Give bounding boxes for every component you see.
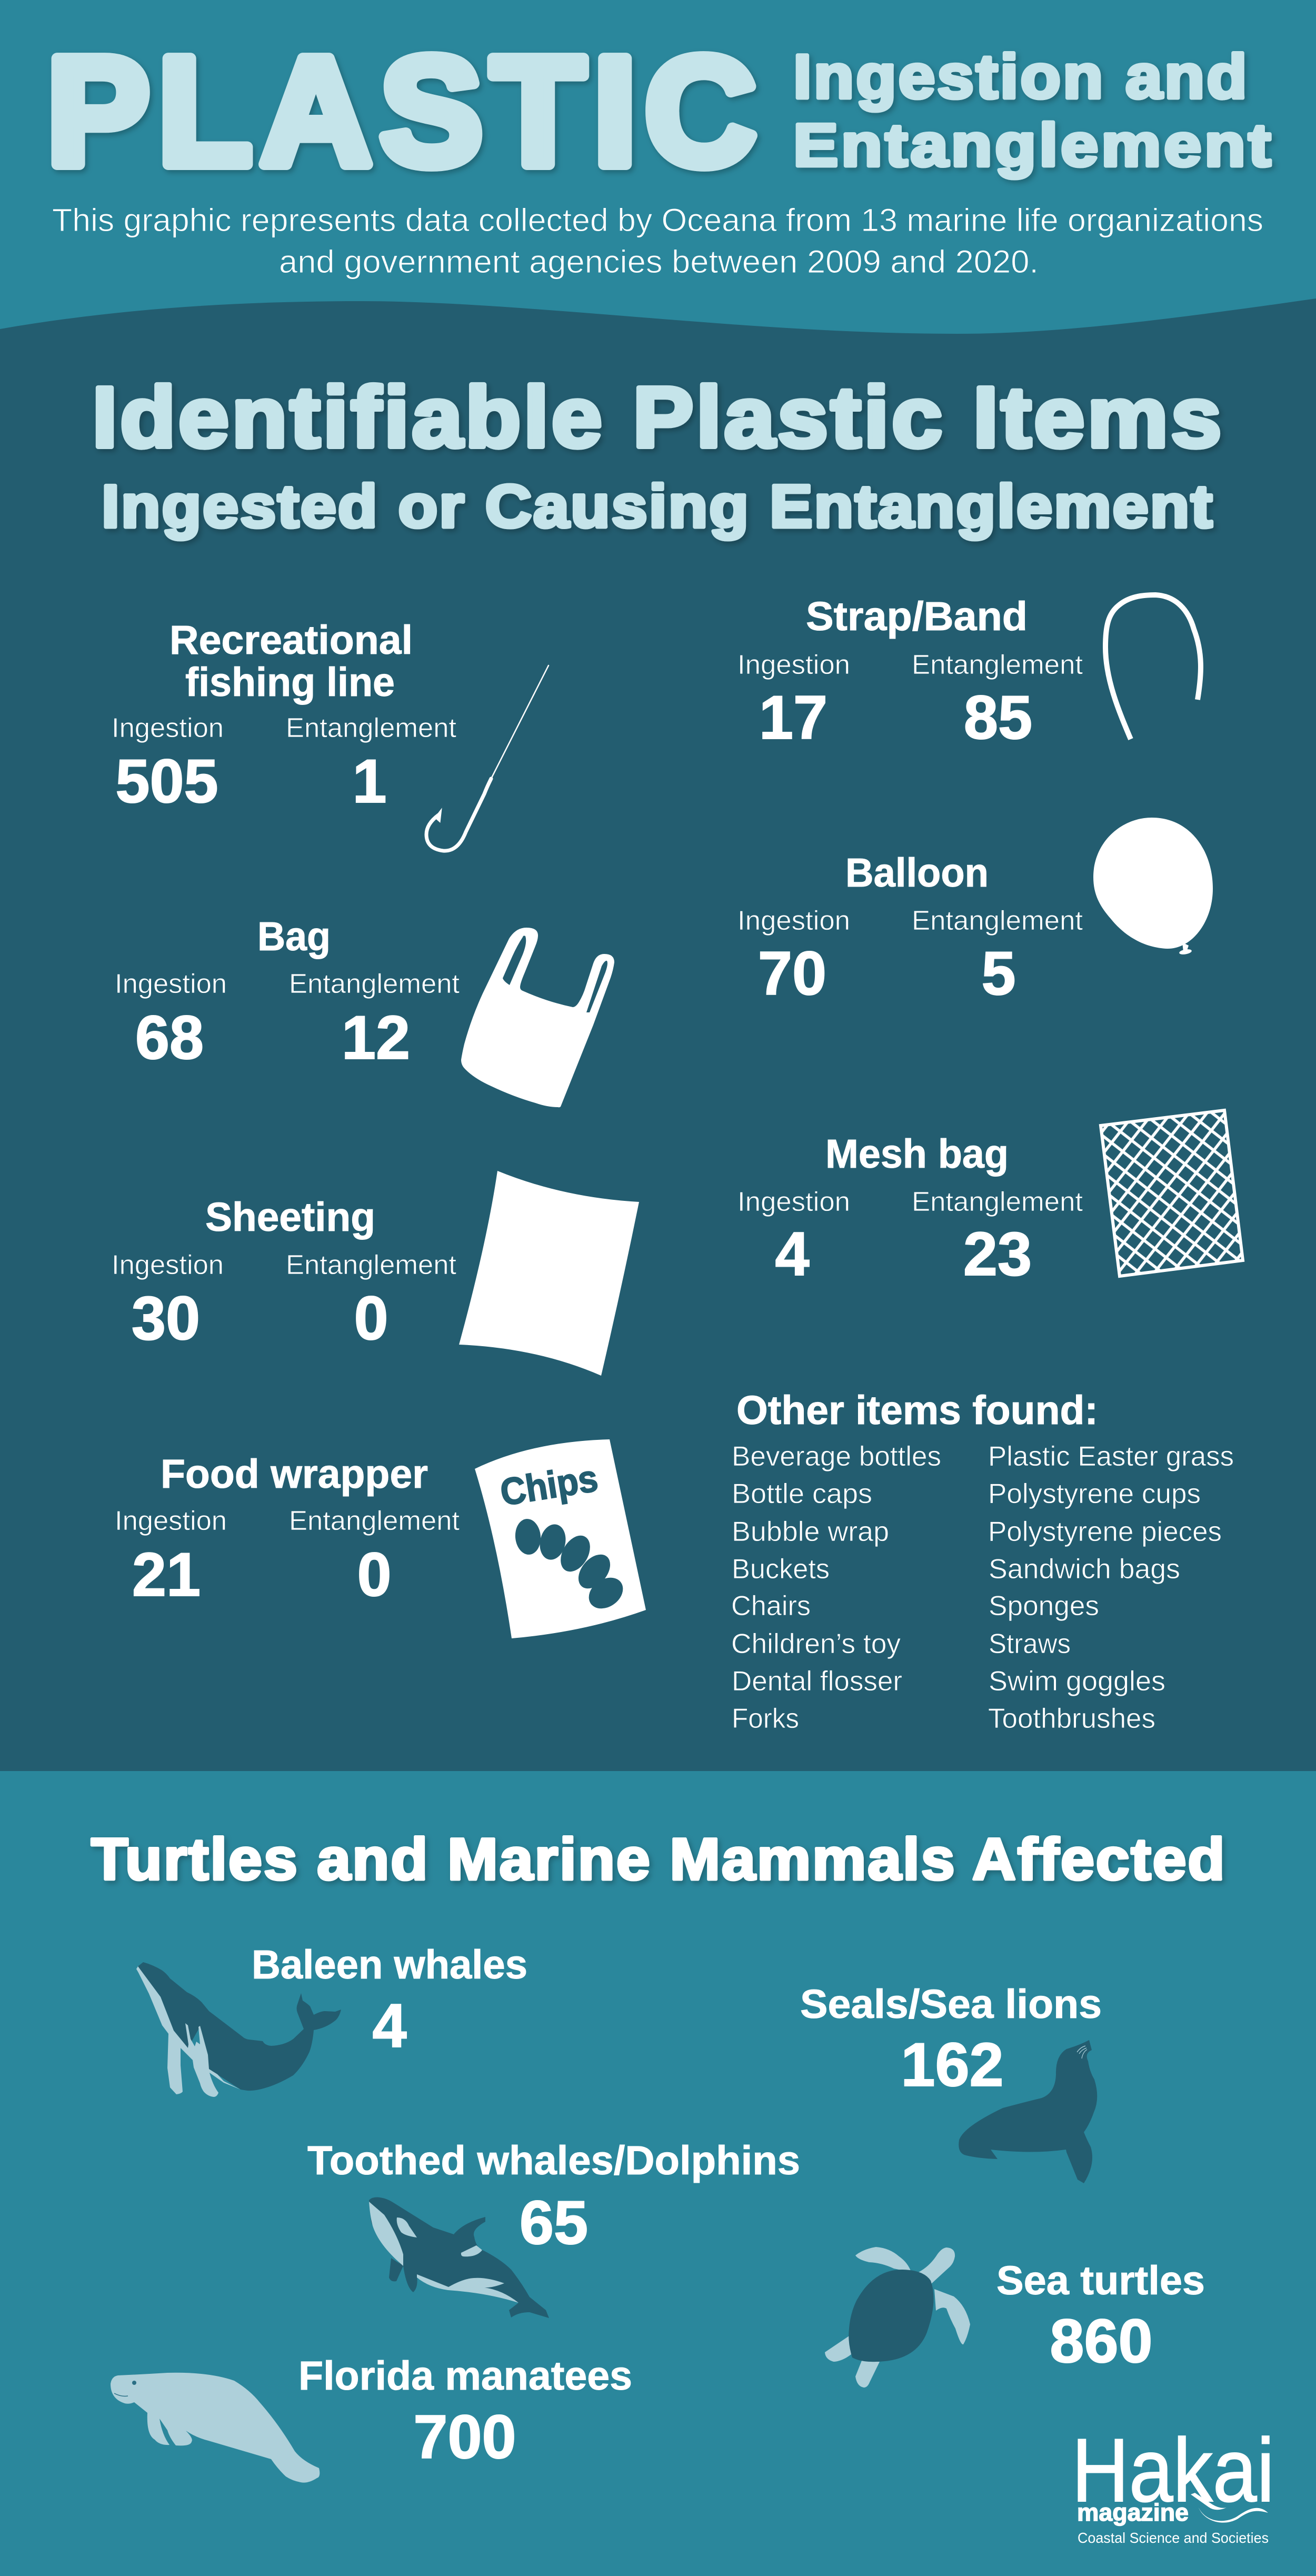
entanglement label: Entanglement xyxy=(286,1250,457,1280)
ingestion label: Ingestion xyxy=(737,650,850,680)
ingestion count: 68 xyxy=(135,1003,204,1072)
subtitle line: Entanglement: Entanglement xyxy=(793,111,1271,178)
label: Seals/Sea lions xyxy=(800,1982,1102,2027)
count: 860 xyxy=(1050,2306,1153,2375)
list: column two: Polystyrene cups xyxy=(988,1478,1201,1509)
icon: plastic bag xyxy=(461,928,614,1107)
list: column two: Swim goggles xyxy=(989,1666,1165,1697)
section subheading: Ingested or Causing Entanglement xyxy=(102,473,1212,540)
panel: recreational fishing line xyxy=(112,618,549,851)
ingestion label: Ingestion xyxy=(112,713,224,743)
panel: strap/band xyxy=(737,594,1201,752)
title: PLASTIC: PLASTIC xyxy=(47,25,756,197)
ingestion count: 21 xyxy=(132,1540,201,1609)
count: 4 xyxy=(372,1991,407,2060)
list: column one: Forks xyxy=(732,1703,799,1734)
icon: manatee xyxy=(111,2373,320,2483)
entanglement label: Entanglement xyxy=(286,713,457,743)
heading: Recreational xyxy=(170,618,413,663)
list: column two: Sandwich bags xyxy=(989,1554,1180,1585)
logo magazine: magazine xyxy=(1077,2499,1189,2526)
heading: Mesh bag xyxy=(825,1131,1009,1177)
label: Baleen whales xyxy=(252,1942,527,1987)
ingestion count: 505 xyxy=(115,747,218,815)
logo: Hakai magazine xyxy=(1072,2420,1274,2546)
panel: sheeting xyxy=(112,1171,639,1376)
entanglement label: Entanglement xyxy=(912,906,1083,936)
entanglement count: 0 xyxy=(357,1540,392,1609)
panel: mesh bag xyxy=(737,1110,1243,1288)
ingestion count: 30 xyxy=(132,1284,200,1352)
ingestion label: Ingestion xyxy=(112,1250,224,1280)
ingestion label: Ingestion xyxy=(737,1187,850,1217)
entanglement count: 1 xyxy=(352,747,387,815)
panel: seals/sea lions xyxy=(800,1982,1102,2183)
panel: other items found xyxy=(731,1388,1234,1734)
icon: sea turtle xyxy=(825,2247,970,2388)
count: 65 xyxy=(520,2188,588,2257)
ingestion label: Ingestion xyxy=(115,1506,227,1536)
icon: sea lion xyxy=(959,2040,1097,2183)
ingestion count: 70 xyxy=(758,939,826,1008)
section heading: Identifiable Plastic Items xyxy=(92,369,1221,540)
intro paragraph xyxy=(52,202,1263,280)
heading: Bag xyxy=(257,914,331,959)
list: column two: Polystyrene pieces xyxy=(988,1516,1222,1547)
list: column two xyxy=(988,1441,1234,1734)
section heading: turtles and marine mammals: Turtles and Marine Mammals Affected xyxy=(91,1827,1225,1893)
panel: florida manatees xyxy=(111,2353,632,2483)
entanglement label: Entanglement xyxy=(289,969,460,999)
entanglement count: 85 xyxy=(964,683,1032,752)
list: column two: Plastic Easter grass xyxy=(988,1441,1234,1472)
list: column one: Buckets xyxy=(732,1554,830,1585)
icon: balloon xyxy=(1093,818,1213,956)
panel: food wrapper xyxy=(115,1439,646,1638)
logo wordmark: Hakai xyxy=(1072,2420,1274,2521)
ingestion label: Ingestion xyxy=(115,969,227,999)
icon: chips bag: Chips xyxy=(497,1457,601,1514)
entanglement label: Entanglement xyxy=(912,650,1083,680)
intro paragraph: and government agencies between 2009 and 2020. xyxy=(279,244,1039,280)
count: 700 xyxy=(413,2402,516,2471)
panel: toothed whales/dolphins xyxy=(307,2138,800,2318)
label: Sea turtles xyxy=(996,2258,1205,2303)
heading: Food wrapper xyxy=(161,1451,428,1497)
panel: dark wave section xyxy=(0,299,1316,1771)
ingestion count: 4 xyxy=(775,1219,810,1288)
entanglement count: 12 xyxy=(342,1003,410,1072)
entanglement count: 0 xyxy=(354,1284,388,1352)
list: column one: Dental flosser xyxy=(732,1666,902,1697)
heading: fishing line xyxy=(185,660,395,705)
ingestion label: Ingestion xyxy=(737,906,850,936)
label: Florida manatees xyxy=(298,2353,632,2399)
panel: bag xyxy=(115,914,614,1107)
heading: Other items found: xyxy=(736,1388,1098,1433)
logo tagline: Coastal Science and Societies xyxy=(1078,2530,1269,2546)
heading xyxy=(170,618,413,705)
icon: chips bag xyxy=(475,1439,646,1638)
entanglement count: 5 xyxy=(981,939,1016,1008)
icon: plastic sheet xyxy=(459,1171,639,1376)
panel: balloon xyxy=(737,818,1213,1008)
icon: mesh net xyxy=(1101,1110,1243,1276)
icon: fish hook xyxy=(426,665,549,851)
panel: sea turtles xyxy=(825,2247,1205,2388)
entanglement label: Entanglement xyxy=(912,1187,1083,1217)
list: column one: Bottle caps xyxy=(732,1478,872,1509)
list: column one: Chairs xyxy=(731,1590,811,1622)
heading: Sheeting xyxy=(205,1195,375,1240)
list: column two: Sponges xyxy=(989,1590,1099,1622)
heading: Balloon xyxy=(845,850,989,896)
list: column two: Straws xyxy=(989,1628,1071,1659)
panel: baleen whales xyxy=(136,1942,527,2097)
icon: orca xyxy=(369,2197,549,2318)
logo wave xyxy=(1191,2493,1268,2523)
icon: humpback whale xyxy=(136,1962,341,2097)
ingestion count: 17 xyxy=(759,683,828,752)
subtitle line: Ingestion and: Ingestion and xyxy=(793,42,1247,111)
icon: strap loop xyxy=(1105,595,1201,739)
entanglement label: Entanglement xyxy=(289,1506,460,1536)
section heading: Identifiable Plastic Items: Identifiable Plastic Items xyxy=(92,369,1221,465)
subtitle block xyxy=(793,42,1271,178)
label: Toothed whales/Dolphins xyxy=(307,2138,800,2183)
list: column one: Children’s toy xyxy=(731,1628,901,1659)
list: column one: Bubble wrap xyxy=(732,1516,889,1547)
intro paragraph: This graphic represents data collected by Oceana from 13 marine life organizations xyxy=(52,202,1263,238)
entanglement count: 23 xyxy=(963,1219,1032,1288)
list: column two: Toothbrushes xyxy=(988,1703,1155,1734)
list: column one xyxy=(731,1441,941,1734)
list: column one: Beverage bottles xyxy=(732,1441,941,1472)
count: 162 xyxy=(901,2030,1004,2099)
heading: Strap/Band xyxy=(806,594,1028,639)
